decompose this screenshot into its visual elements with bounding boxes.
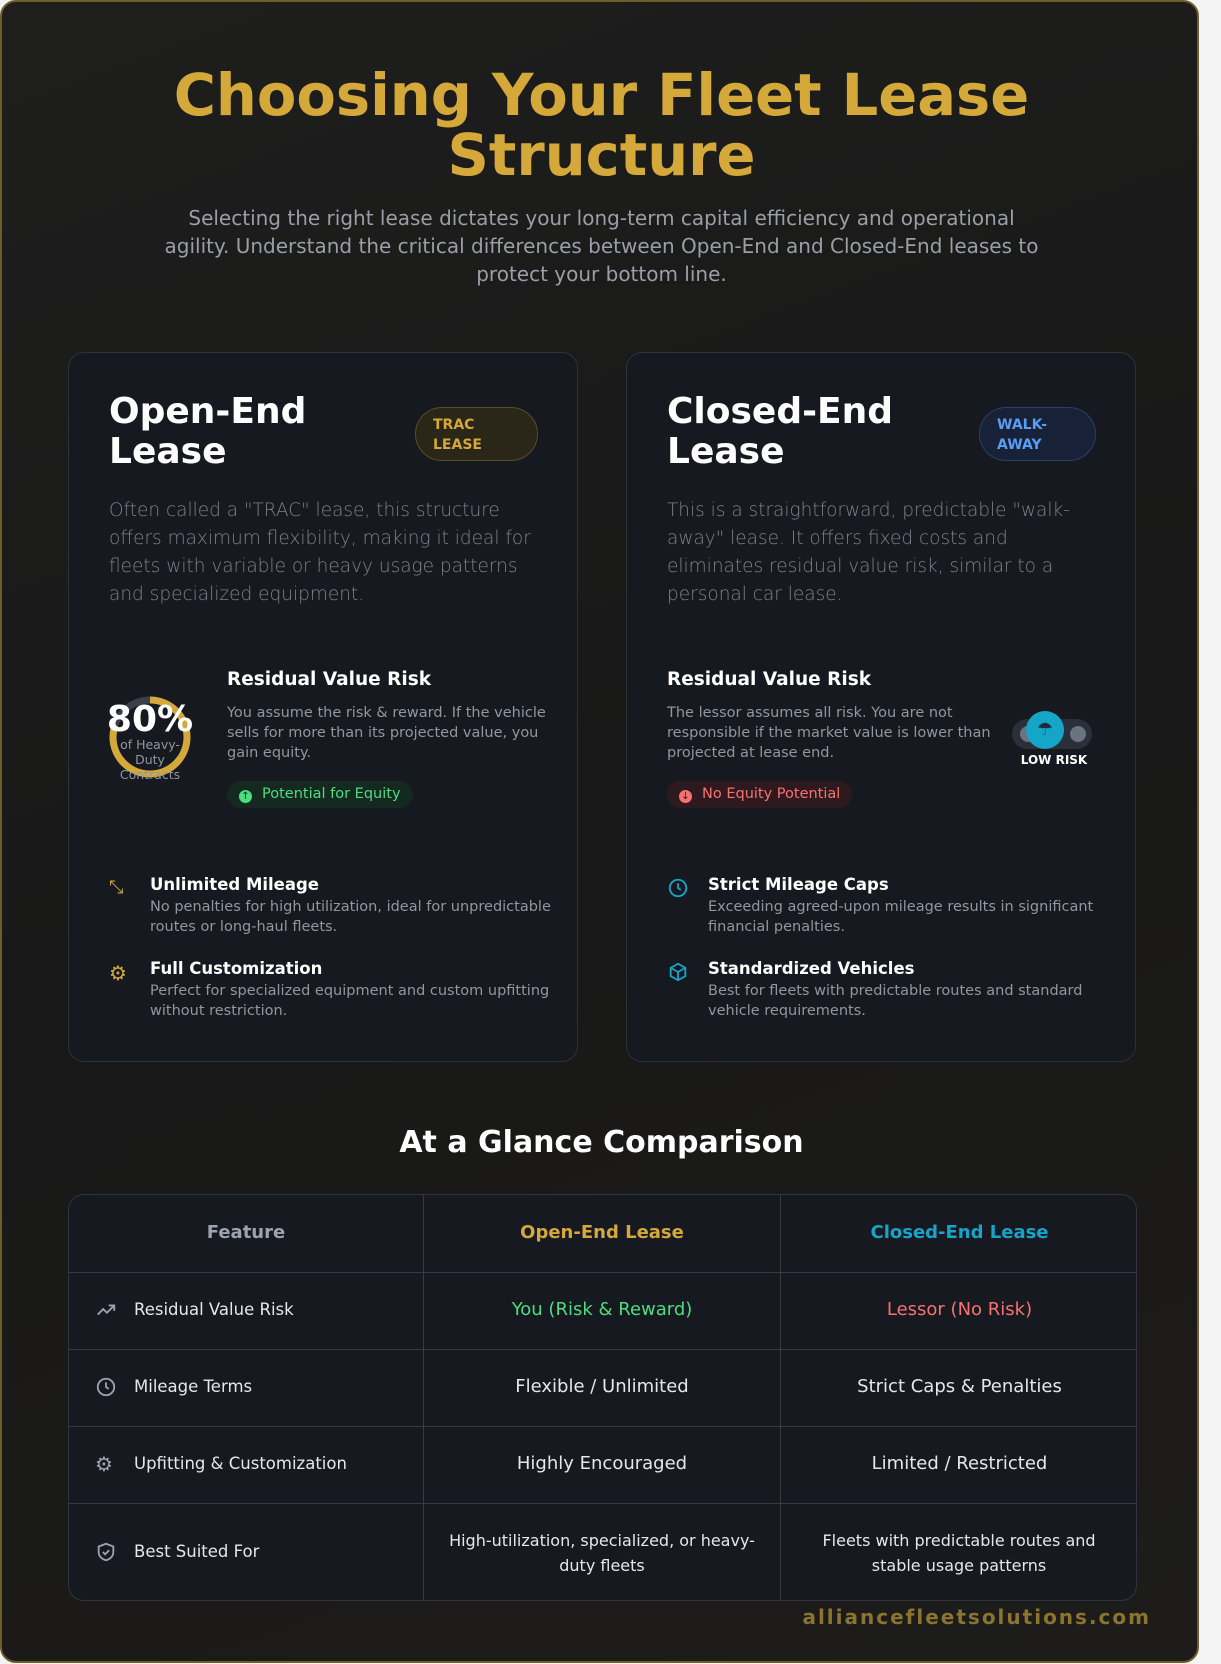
row: upfitting: Limited / Restricted	[872, 1453, 1047, 1474]
badge: trac lease	[415, 407, 538, 461]
header row: Open-End Lease	[520, 1222, 684, 1243]
feature: unlimited mileage: No penalties for high utilization, ideal for unpredictable routes or long-haul fleets.	[150, 899, 551, 935]
icon: cube	[670, 962, 686, 982]
card title: Open-End	[109, 391, 306, 432]
row: best suited for	[69, 1503, 1138, 1602]
feature: full customization	[109, 959, 549, 1019]
card title: Closed-End	[667, 391, 893, 432]
description: Often called a "TRAC" lease, this structure offers maximum flexibility, making it ideal for fleets with variable or heavy usage patterns and specialized equipment.	[109, 500, 531, 605]
pill: potential for equity	[227, 781, 413, 808]
feature: full customization: Full Customization	[150, 959, 322, 978]
pill: potential for equity: Potential for Equity	[262, 786, 401, 802]
subtitle: Selecting the right lease dictates your long-term capital efficiency and operational agility. Understand the critical differences between Open-End and Closed-End leases to protect your bottom line.	[165, 206, 1038, 286]
row: mileage terms	[69, 1349, 1138, 1426]
feature: unlimited mileage	[109, 875, 551, 935]
row: residual value risk: Residual Value Risk	[134, 1300, 294, 1319]
badge: walk-away: AWAY	[997, 437, 1042, 453]
residual heading: Residual Value Risk	[227, 669, 431, 690]
title: Choosing Your Fleet Lease	[174, 62, 1029, 129]
feature: strict mileage caps	[668, 875, 1093, 935]
ring chart: 80%: 80%	[107, 699, 193, 740]
ring chart: 80%	[107, 696, 193, 782]
feature: full customization: Perfect for specialized equipment and custom upfitting without restriction.	[150, 983, 549, 1019]
card title	[109, 391, 306, 472]
row: residual value risk: You (Risk & Reward)	[512, 1299, 692, 1320]
row: mileage terms: Flexible / Unlimited	[515, 1376, 689, 1397]
feature: strict mileage caps: Strict Mileage Caps	[708, 875, 889, 894]
pill: no equity potential: ↓	[681, 791, 690, 802]
feature: unlimited mileage: Unlimited Mileage	[150, 875, 319, 894]
row: best suited for: High-utilization, specialized, or heavy-duty fleets	[449, 1531, 755, 1575]
row: residual value risk	[69, 1272, 1138, 1349]
row: residual value risk: Lessor (No Risk)	[887, 1299, 1032, 1320]
badge: trac lease: TRAC	[433, 417, 474, 433]
ring chart: 80%: of Heavy-Duty Contracts	[120, 737, 180, 782]
icon: gear: ⚙	[109, 961, 127, 985]
feature: standardized vehicles: Best for fleets with predictable routes and standard vehicle requirements.	[708, 983, 1082, 1019]
panel: closed-end lease	[626, 352, 1136, 1062]
toggle: low risk: LOW RISK	[1021, 753, 1087, 767]
icon: arrows: ⤡	[109, 877, 123, 898]
row: best suited for: Fleets with predictable routes and stable usage patterns	[822, 1531, 1096, 1575]
residual text: The lessor assumes all risk. You are not responsible if the market value is lower than projected at lease end.	[667, 705, 991, 761]
row: mileage terms: Mileage Terms	[134, 1377, 252, 1396]
toggle: low risk: ☂	[1037, 719, 1053, 740]
row: upfitting: ⚙	[95, 1452, 113, 1476]
header row	[207, 1222, 1049, 1243]
icon: clock	[668, 878, 688, 898]
pill: no equity potential	[667, 781, 852, 808]
card title: Lease	[109, 431, 226, 472]
badge: trac lease: LEASE	[433, 437, 482, 453]
feature: strict mileage caps: Exceeding agreed-upon mileage results in significant financial penalties.	[708, 899, 1093, 935]
row: upfitting: Upfitting & Customization	[134, 1454, 347, 1473]
comparison table	[68, 1194, 1137, 1601]
row: upfitting: Highly Encouraged	[517, 1453, 687, 1474]
header row: Feature	[207, 1222, 285, 1243]
card title	[667, 391, 893, 472]
row: mileage terms: Strict Caps & Penalties	[857, 1376, 1062, 1397]
header row: Closed-End Lease	[870, 1222, 1049, 1243]
feature: standardized vehicles: Standardized Vehicles	[708, 959, 914, 978]
row: upfitting	[69, 1426, 1138, 1503]
card title: Lease	[667, 431, 784, 472]
footer: website: alliancefleetsolutions.com	[802, 1605, 1151, 1629]
badge: walk-away	[979, 407, 1096, 461]
heading: at a glance: At a Glance Comparison	[399, 1125, 804, 1160]
badge: walk-away: WALK-	[997, 417, 1047, 433]
title: Structure	[447, 122, 756, 189]
description: This is a straightforward, predictable "walk-away" lease. It offers fixed costs and eliminates residual value risk, similar to a personal car lease.	[667, 500, 1070, 605]
row: best suited for: Best Suited For	[134, 1542, 259, 1561]
feature: standardized vehicles	[670, 959, 1082, 1019]
title	[174, 62, 1029, 189]
toggle: low risk	[1012, 711, 1092, 767]
panel: open-end lease	[68, 352, 578, 1062]
residual heading: Residual Value Risk	[667, 669, 871, 690]
pill: no equity potential: No Equity Potential	[702, 786, 840, 802]
residual text: You assume the risk & reward. If the vehicle sells for more than its projected value, you gain equity.	[227, 705, 546, 761]
pill: potential for equity: ↑	[241, 791, 250, 802]
